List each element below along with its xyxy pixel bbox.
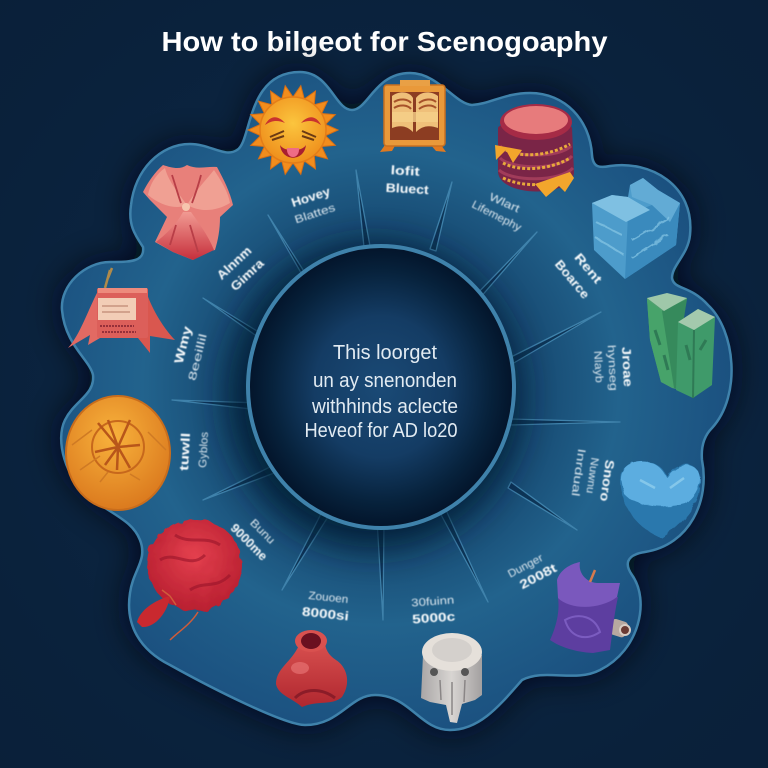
title: How to bilgeot for Scenogoaphy — [162, 26, 608, 57]
spokes — [172, 170, 620, 620]
label: Hovey Blattes: Blattes — [293, 202, 337, 226]
icon: blue cube — [592, 178, 680, 279]
label: tuwll Gyblos: Gyblos — [197, 431, 211, 468]
label: Wmy Eeeill — [172, 325, 210, 382]
label: lofit Bluect: lofit — [390, 163, 421, 179]
icon: white cylinder — [421, 633, 482, 723]
label: Hovey Blattes: Hovey — [290, 184, 332, 210]
label: tuwll Gyblos — [177, 431, 211, 471]
label: Wlart Lifemephy: Lifemephy — [470, 199, 524, 234]
label: Snoro: Inrdual — [569, 448, 587, 497]
label: Rent Boarce — [552, 251, 605, 302]
label: Snoro: Nuwnu — [584, 457, 600, 494]
label: Zouoen 8000si: Zouoen — [308, 590, 349, 606]
label: Jroae — [591, 345, 635, 391]
label: Hovey Blattes — [290, 184, 337, 226]
label: 30fuinn 5000c: 30fuinn — [411, 595, 455, 609]
centre text: Heveof for AD lo20 — [304, 420, 458, 442]
icon: plate stack — [495, 104, 574, 197]
label: 30fuinn 5000c — [411, 595, 456, 626]
label: lofit Bluect: Bluect — [385, 181, 430, 197]
label: Snoro — [569, 448, 617, 503]
label: Rent Boarce: Boarce — [552, 257, 592, 302]
label: Rent Boarce: Rent — [571, 251, 605, 287]
centre text: un ay snenonden — [313, 370, 457, 392]
label: Jroae: hynseg — [605, 345, 619, 391]
label: lofit Bluect — [385, 163, 430, 197]
icon: red textured ball — [137, 519, 242, 640]
label: Alnnm Gimra — [214, 244, 268, 294]
centre text: This loorget — [333, 342, 437, 364]
label: Zouoen 8000si: 8000si — [301, 605, 350, 623]
label: 30fuinn 5000c: 5000c — [412, 610, 456, 626]
label: Zouoen 8000si — [301, 590, 350, 623]
icon: purple canister — [550, 562, 630, 653]
label: Jroae: Nlayb — [591, 351, 605, 383]
label: Wmy Eeeill: 8eeillil — [186, 333, 210, 382]
icon: book cabinet — [380, 80, 446, 152]
label: Bunu 9000me: 9000me — [228, 521, 270, 563]
label: Dunger 2008t: 2008t — [517, 560, 560, 592]
icon: orange dome — [66, 396, 170, 510]
panel: scalloped wheel — [61, 72, 732, 730]
centre text: withhinds aclecte — [311, 396, 458, 418]
label: Alnnm Gimra: Alnnm — [214, 244, 254, 283]
label: Wmy Eeeill: Wmy — [172, 325, 195, 365]
centre text — [304, 342, 458, 442]
icon: green pillars — [647, 293, 715, 398]
label: Bunu 9000me: Bunu — [247, 517, 277, 547]
label: Snoro: Snoro — [597, 459, 617, 503]
centre circle — [228, 244, 520, 548]
icon: pink flower bow — [143, 165, 233, 260]
icon: red vase — [276, 630, 347, 707]
label: Dunger 2008t: Dunger — [506, 552, 545, 581]
label: tuwll Gyblos: tuwll — [177, 432, 193, 471]
icon: blue heart — [620, 461, 700, 538]
label: Alnnm Gimra: Gimra — [228, 256, 268, 294]
icon: coral ribbon machine — [68, 268, 175, 353]
label: Dunger 2008t — [506, 552, 560, 592]
icon: sun face — [248, 86, 338, 174]
label: Wlart Lifemephy: Wlart — [487, 191, 521, 215]
label: Jroae: Jroae — [619, 346, 635, 387]
